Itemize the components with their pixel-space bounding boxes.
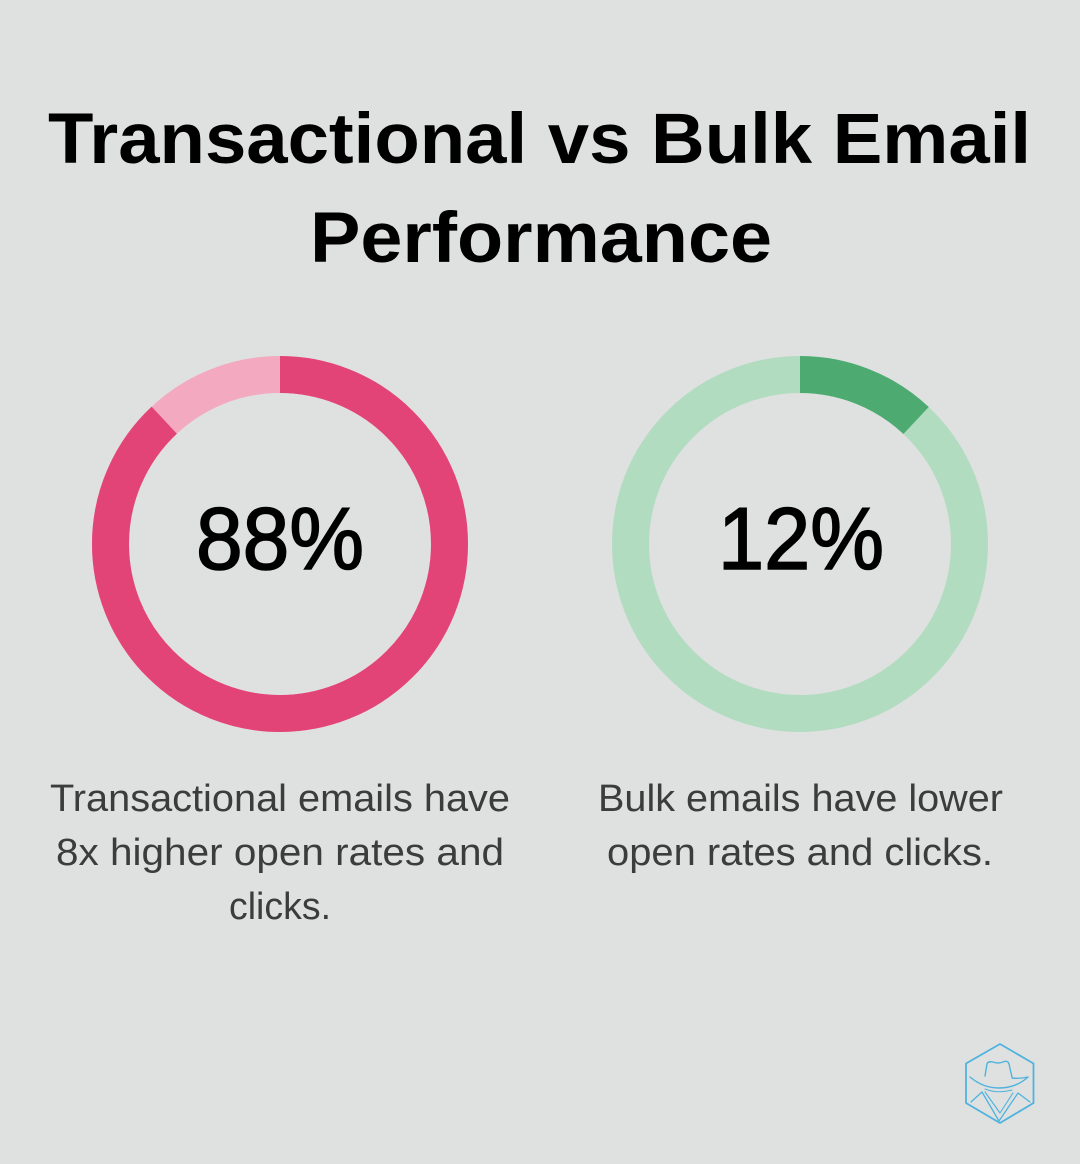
- title: [48, 100, 1031, 278]
- description: bulk emails: [598, 778, 1003, 874]
- description: bulk emails: Bulk emails have lower: [598, 778, 1003, 820]
- description: transactional emails: clicks.: [229, 886, 331, 928]
- panel: bulk emails: [598, 374, 1003, 874]
- description: bulk emails: open rates and clicks.: [607, 832, 993, 874]
- donut chart: 88%: [110, 374, 450, 714]
- value: 88%: 88%: [196, 489, 364, 588]
- description: transactional emails: Transactional emails have: [50, 778, 510, 820]
- icon: hexagon logo with hat: [966, 1044, 1034, 1123]
- title: Performance: [310, 199, 772, 278]
- panel: transactional emails: [50, 374, 510, 928]
- value: 12%: 12%: [718, 489, 884, 588]
- description: transactional emails: 8x higher open rates and: [56, 832, 504, 874]
- donut chart: 12%: [630, 374, 970, 714]
- title: Transactional vs Bulk Email: [48, 100, 1031, 179]
- description: transactional emails: [50, 778, 510, 928]
